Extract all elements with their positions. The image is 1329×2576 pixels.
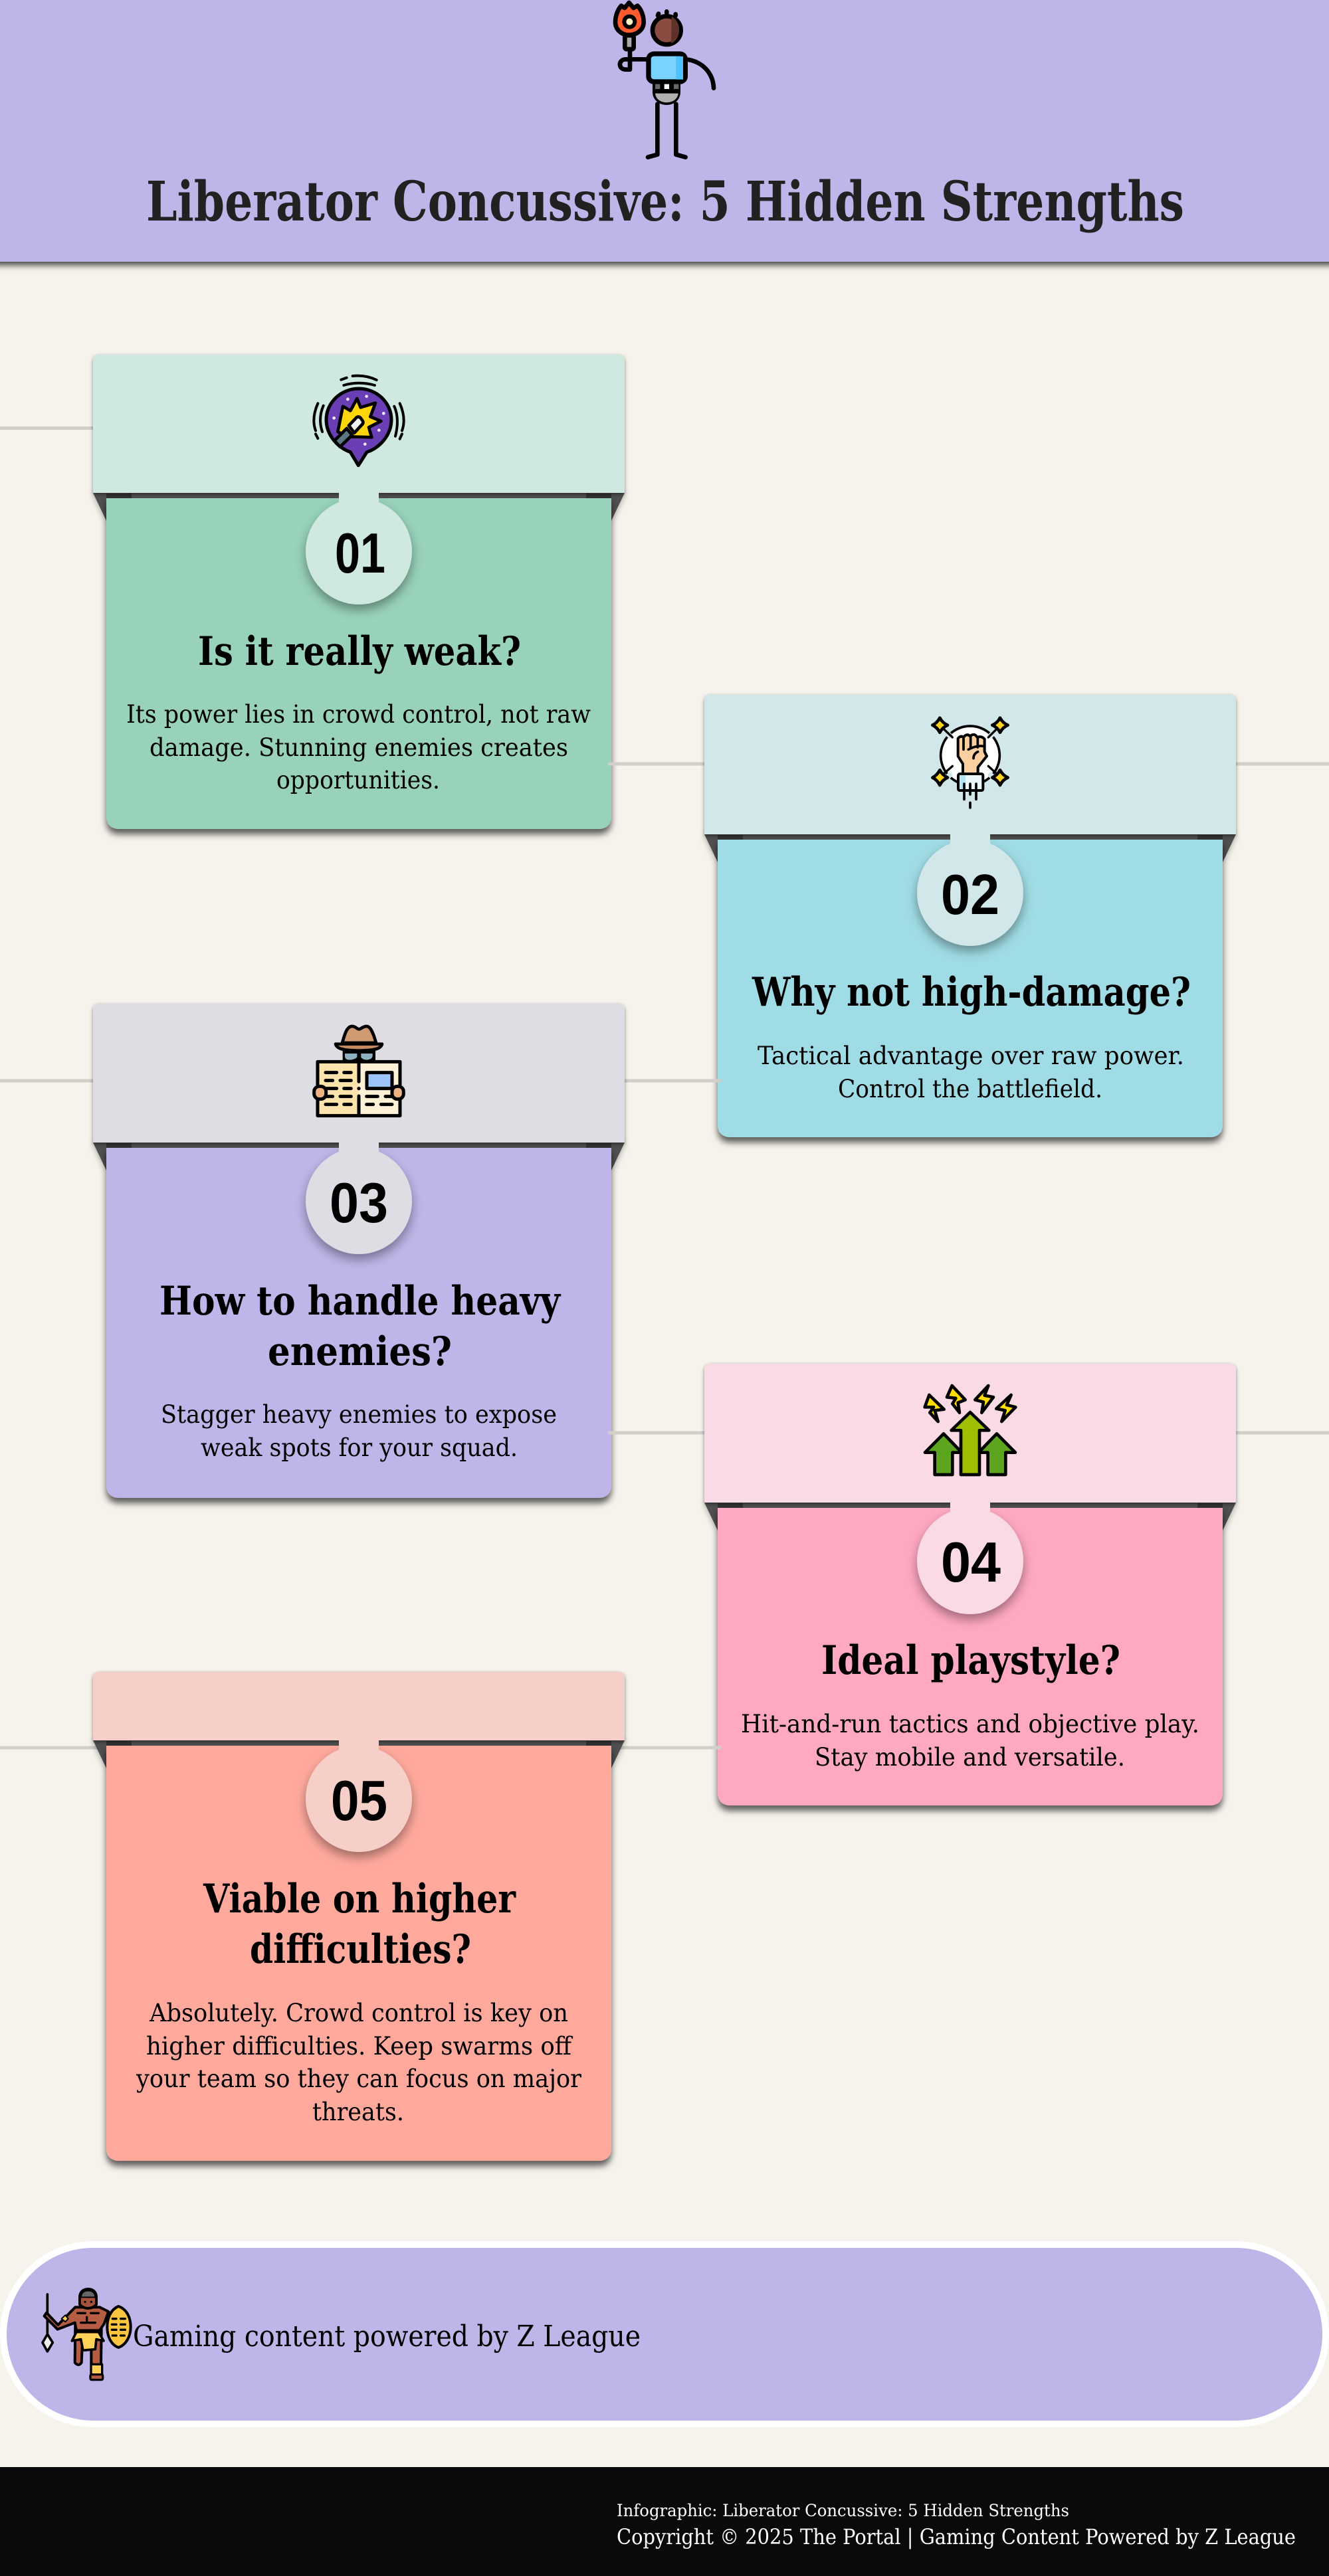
footer infographic title: Infographic: Liberator Concussive: 5 Hidden Strengths xyxy=(617,2501,1069,2520)
card text xyxy=(161,1400,557,1462)
card heading xyxy=(159,1278,562,1375)
card text xyxy=(136,1999,581,2126)
connector line xyxy=(0,1746,721,1750)
card text: Absolutely. Crowd control is key on xyxy=(149,1999,568,2027)
card text: Hit-and-run tactics and objective play. xyxy=(741,1710,1199,1738)
icon panel xyxy=(93,1004,625,1143)
number badge xyxy=(306,1138,412,1254)
number badge xyxy=(917,830,1023,946)
card text xyxy=(758,1042,1184,1103)
card heading: difficulties? xyxy=(250,1926,471,1973)
number badge: 03 xyxy=(330,1172,388,1235)
card text: opportunities. xyxy=(276,766,440,794)
icon panel xyxy=(704,695,1236,834)
card heading: Ideal playstyle? xyxy=(821,1637,1120,1684)
card text: Stay mobile and versatile. xyxy=(815,1743,1125,1772)
fold shadow xyxy=(93,493,625,521)
number badge: 05 xyxy=(331,1770,387,1833)
card text: your team so they can focus on major xyxy=(136,2065,581,2093)
card text: higher difficulties. Keep swarms off xyxy=(146,2032,573,2061)
number badge xyxy=(306,1736,412,1852)
footer band xyxy=(0,2467,1329,2576)
icon: rising arrows xyxy=(925,1386,1015,1475)
card 05 xyxy=(0,1672,721,2161)
card text: threats. xyxy=(312,2098,404,2126)
icon panel xyxy=(93,1672,625,1740)
fold shadow xyxy=(93,1143,625,1170)
card text xyxy=(126,700,591,794)
icon: raised fist xyxy=(932,718,1008,808)
connector line xyxy=(608,763,1329,765)
card 03 xyxy=(0,1004,721,1498)
card text: Control the battlefield. xyxy=(838,1075,1102,1103)
fold shadow xyxy=(93,1740,625,1768)
card body xyxy=(106,498,611,829)
card text: Its power lies in crowd control, not raw xyxy=(126,700,591,729)
icon: liberator figure with torch xyxy=(615,3,714,157)
card heading: How to handle heavy xyxy=(159,1278,562,1325)
connector line xyxy=(0,426,96,430)
fold shadow xyxy=(704,834,1236,862)
icon: magic wand bubble xyxy=(314,376,404,466)
number badge: 01 xyxy=(335,522,385,585)
connector line xyxy=(0,1079,721,1083)
card 01 xyxy=(0,355,625,829)
icon: detective reading newspaper xyxy=(314,1026,403,1116)
icon: warrior with spear and shield xyxy=(43,2289,131,2380)
card text xyxy=(741,1710,1199,1772)
card 02 xyxy=(608,695,1329,1137)
card heading xyxy=(203,1876,516,1973)
card body xyxy=(718,1508,1223,1805)
card text: weak spots for your squad. xyxy=(201,1433,518,1462)
card text: Stagger heavy enemies to expose xyxy=(161,1400,557,1429)
fold shadow xyxy=(704,1503,1236,1530)
card heading: Viable on higher xyxy=(203,1876,516,1922)
card 04 xyxy=(608,1364,1329,1805)
header band xyxy=(0,0,1329,262)
card body xyxy=(106,1148,611,1498)
number badge xyxy=(306,488,412,604)
card body xyxy=(106,1746,611,2161)
card heading: Is it really weak? xyxy=(198,628,521,675)
icon panel xyxy=(93,355,625,493)
number badge xyxy=(917,1498,1023,1614)
sponsor pill xyxy=(3,2245,1326,2424)
number badge: 04 xyxy=(941,1531,1001,1594)
card heading: Why not high-damage? xyxy=(752,969,1191,1016)
sponsor text: Gaming content powered by Z League xyxy=(133,2320,641,2353)
card text: damage. Stunning enemies creates xyxy=(150,733,568,762)
card body xyxy=(718,840,1223,1137)
card text: Tactical advantage over raw power. xyxy=(758,1042,1184,1070)
number badge: 02 xyxy=(941,864,999,927)
connector line xyxy=(608,1431,1329,1435)
icon panel xyxy=(704,1364,1236,1503)
card heading: enemies? xyxy=(268,1329,452,1375)
